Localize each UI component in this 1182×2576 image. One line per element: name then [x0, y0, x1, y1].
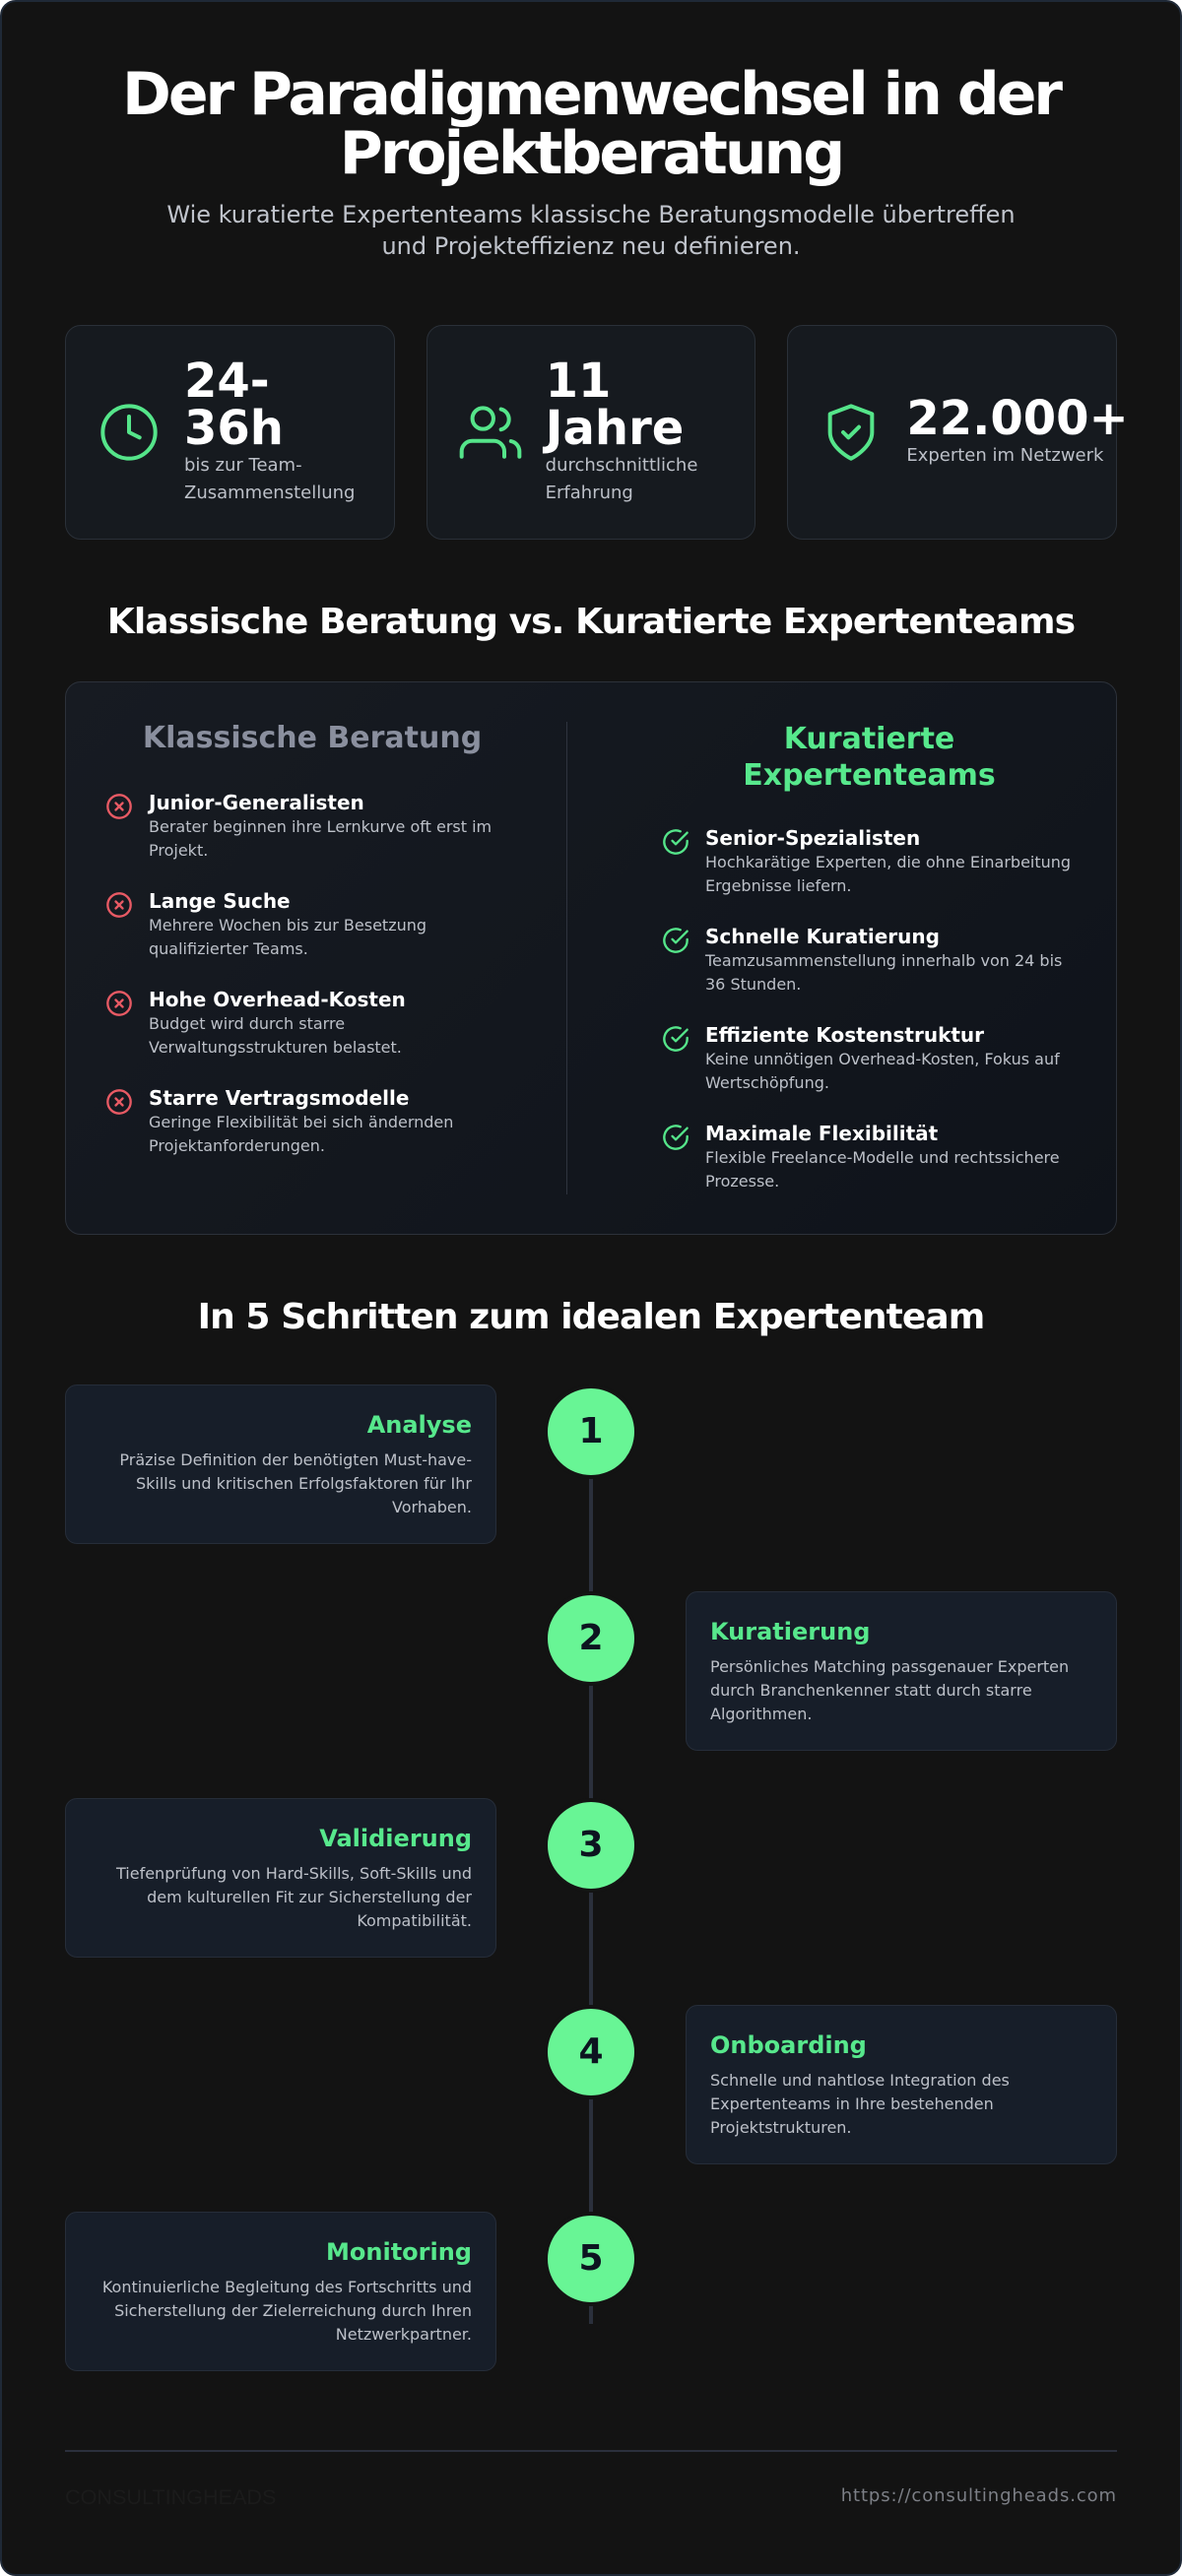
- step number 2: 2: [578, 1617, 604, 1658]
- icon: cross: [106, 892, 132, 918]
- item: Schnelle Kuratierung: [663, 925, 1062, 994]
- item text: [705, 853, 1071, 895]
- item text: Flexible Freelance-Modelle und rechtssichere: [705, 1148, 1060, 1167]
- step text: dem kulturellen Fit zur Sicherstellung der: [147, 1888, 472, 1906]
- icon: shield check: [827, 404, 875, 461]
- item: Maximale Flexibilität: [663, 1122, 1060, 1191]
- step text: Vorhaben.: [392, 1498, 472, 1516]
- stat value and label: Experten im Netzwerk: [906, 445, 1103, 466]
- title: Der Paradigmenwechsel in der: [122, 60, 1060, 129]
- icon: cross: [106, 794, 132, 819]
- step card: Analyse: [65, 1385, 496, 1544]
- footer: [65, 2450, 1117, 2509]
- step title: Validierung: [319, 1825, 472, 1852]
- item title: Hohe Overhead-Kosten: [149, 988, 406, 1011]
- item text: [149, 1113, 453, 1155]
- item text: [149, 817, 492, 860]
- footer logo text: CONSULTINGHEADS: [65, 2484, 276, 2509]
- item: Junior-Generalisten: [106, 791, 492, 860]
- step title: Kuratierung: [710, 1618, 870, 1645]
- step text: Expertenteams in Ihre bestehenden: [710, 2094, 994, 2113]
- step number 3: [544, 1798, 638, 1893]
- stat card: team assembly time: [65, 325, 395, 540]
- stat value and label: Erfahrung: [546, 483, 633, 503]
- item: Senior-Spezialisten: [663, 826, 1071, 895]
- step text: Persönliches Matching passgenauer Experten: [710, 1657, 1069, 1676]
- item text: [149, 916, 427, 958]
- step text: Kontinuierliche Begleitung des Fortschritts und: [102, 2278, 472, 2296]
- step number 5: 5: [578, 2237, 604, 2279]
- step text: [710, 1657, 1069, 1723]
- section heading: steps: In 5 Schritten zum idealen Expertenteam: [198, 1297, 984, 1337]
- item title: Schnelle Kuratierung: [705, 925, 940, 948]
- footer url: https://consultingheads.com: [841, 2485, 1117, 2506]
- item text: Prozesse.: [705, 1172, 779, 1191]
- item title: Senior-Spezialisten: [705, 826, 920, 850]
- step text: [710, 2071, 1010, 2137]
- icon: cross: [106, 1089, 132, 1115]
- stat card: network size: [787, 325, 1117, 540]
- item text: [705, 1148, 1060, 1191]
- icon: cross: [106, 991, 132, 1016]
- subtitle: und Projekteffizienz neu definieren.: [381, 232, 801, 260]
- step card: Kuratierung: [686, 1591, 1117, 1751]
- item title: Maximale Flexibilität: [705, 1122, 938, 1145]
- divider: [566, 722, 567, 1194]
- section heading: comparison: Klassische Beratung vs. Kuratierte Expertenteams: [107, 602, 1075, 642]
- stat value and label: [542, 354, 697, 503]
- timeline line: [589, 1385, 593, 2324]
- panel: comparison: [65, 681, 1117, 1235]
- item text: Hochkarätige Experten, die ohne Einarbeitung: [705, 853, 1071, 871]
- item text: Budget wird durch starre: [149, 1014, 345, 1033]
- item title: Effiziente Kostenstruktur: [705, 1023, 984, 1047]
- item text: Keine unnötigen Overhead-Kosten, Fokus auf: [705, 1050, 1060, 1068]
- step text: [102, 2278, 472, 2344]
- stat value and label: 11: [546, 354, 611, 409]
- step card: Onboarding: [686, 2005, 1117, 2164]
- step text: [119, 1450, 472, 1516]
- stat card: experience: [427, 325, 755, 540]
- heading: classic consulting: Klassische Beratung: [143, 721, 482, 755]
- step text: Präzise Definition der benötigten Must-have-: [119, 1450, 472, 1469]
- stat value and label: durchschnittliche: [546, 455, 697, 476]
- item text: [705, 1050, 1060, 1092]
- item text: Mehrere Wochen bis zur Besetzung: [149, 916, 427, 934]
- item: Hohe Overhead-Kosten: [106, 988, 406, 1057]
- step text: Projektstrukturen.: [710, 2118, 852, 2137]
- step text: Algorithmen.: [710, 1705, 812, 1723]
- step card: Validierung: [65, 1798, 496, 1958]
- step text: Kompatibilität.: [357, 1911, 472, 1930]
- item text: Projekt.: [149, 841, 208, 860]
- heading: curated expert teams: [743, 722, 996, 793]
- step number 5: [544, 2212, 638, 2306]
- item text: Geringe Flexibilität bei sich ändernden: [149, 1113, 453, 1131]
- subtitle: [166, 201, 1016, 260]
- title: [122, 60, 1063, 188]
- item text: Verwaltungsstrukturen belastet.: [149, 1038, 402, 1057]
- item text: Berater beginnen ihre Lernkurve oft erst im: [149, 817, 492, 836]
- step text: Netzwerkpartner.: [336, 2325, 472, 2344]
- item text: Ergebnisse liefern.: [705, 876, 851, 895]
- item: Effiziente Kostenstruktur: [663, 1023, 1060, 1092]
- item: Starre Vertragsmodelle: [106, 1086, 453, 1155]
- step number 1: 1: [578, 1410, 604, 1451]
- item text: Wertschöpfung.: [705, 1073, 829, 1092]
- heading: curated expert teams: Expertenteams: [743, 758, 996, 793]
- item text: 36 Stunden.: [705, 975, 801, 994]
- item text: [705, 951, 1062, 994]
- item title: Starre Vertragsmodelle: [149, 1086, 409, 1110]
- item text: [149, 1014, 402, 1057]
- item title: Junior-Generalisten: [149, 791, 364, 814]
- stat value and label: 22.000+: [906, 391, 1129, 446]
- step number 1: [544, 1385, 638, 1479]
- step text: [116, 1864, 472, 1930]
- icon: users: [459, 406, 522, 459]
- item title: Lange Suche: [149, 889, 291, 913]
- stat value and label: bis zur Team-: [184, 455, 302, 476]
- stat value and label: [184, 354, 355, 503]
- icon: check: [663, 928, 689, 953]
- item text: Projektanforderungen.: [149, 1136, 325, 1155]
- stat value and label: Jahre: [546, 401, 684, 456]
- icon: check: [663, 829, 689, 855]
- step title: Analyse: [367, 1411, 472, 1439]
- heading: curated expert teams: Kuratierte: [784, 722, 954, 756]
- subtitle: Wie kuratierte Expertenteams klassische Beratungsmodelle übertreffen: [166, 201, 1016, 228]
- step number 4: 4: [578, 2030, 604, 2072]
- icon: check: [663, 1026, 689, 1052]
- step title: Monitoring: [326, 2238, 472, 2266]
- item text: Teamzusammenstellung innerhalb von 24 bis: [705, 951, 1062, 970]
- icon: check: [663, 1125, 689, 1150]
- step card: Monitoring: [65, 2212, 496, 2371]
- icon: clock: [100, 404, 158, 461]
- step text: Skills und kritischen Erfolgsfaktoren für Ihr: [136, 1474, 472, 1493]
- step number 4: [544, 2005, 638, 2099]
- stat value and label: Zusammenstellung: [184, 483, 355, 503]
- title: Projektberatung: [340, 119, 842, 188]
- step text: durch Branchenkenner statt durch starre: [710, 1681, 1032, 1700]
- item: Lange Suche: [106, 889, 427, 958]
- item text: qualifizierter Teams.: [149, 939, 308, 958]
- stat value and label: 24-: [184, 354, 270, 409]
- step text: Tiefenprüfung von Hard-Skills, Soft-Skills und: [116, 1864, 472, 1883]
- step title: Onboarding: [710, 2031, 867, 2059]
- step number 2: [544, 1591, 638, 1686]
- step text: Schnelle und nahtlose Integration des: [710, 2071, 1010, 2090]
- step text: Sicherstellung der Zielerreichung durch Ihren: [114, 2301, 472, 2320]
- stat value and label: 36h: [184, 401, 284, 456]
- step number 3: 3: [578, 1824, 604, 1865]
